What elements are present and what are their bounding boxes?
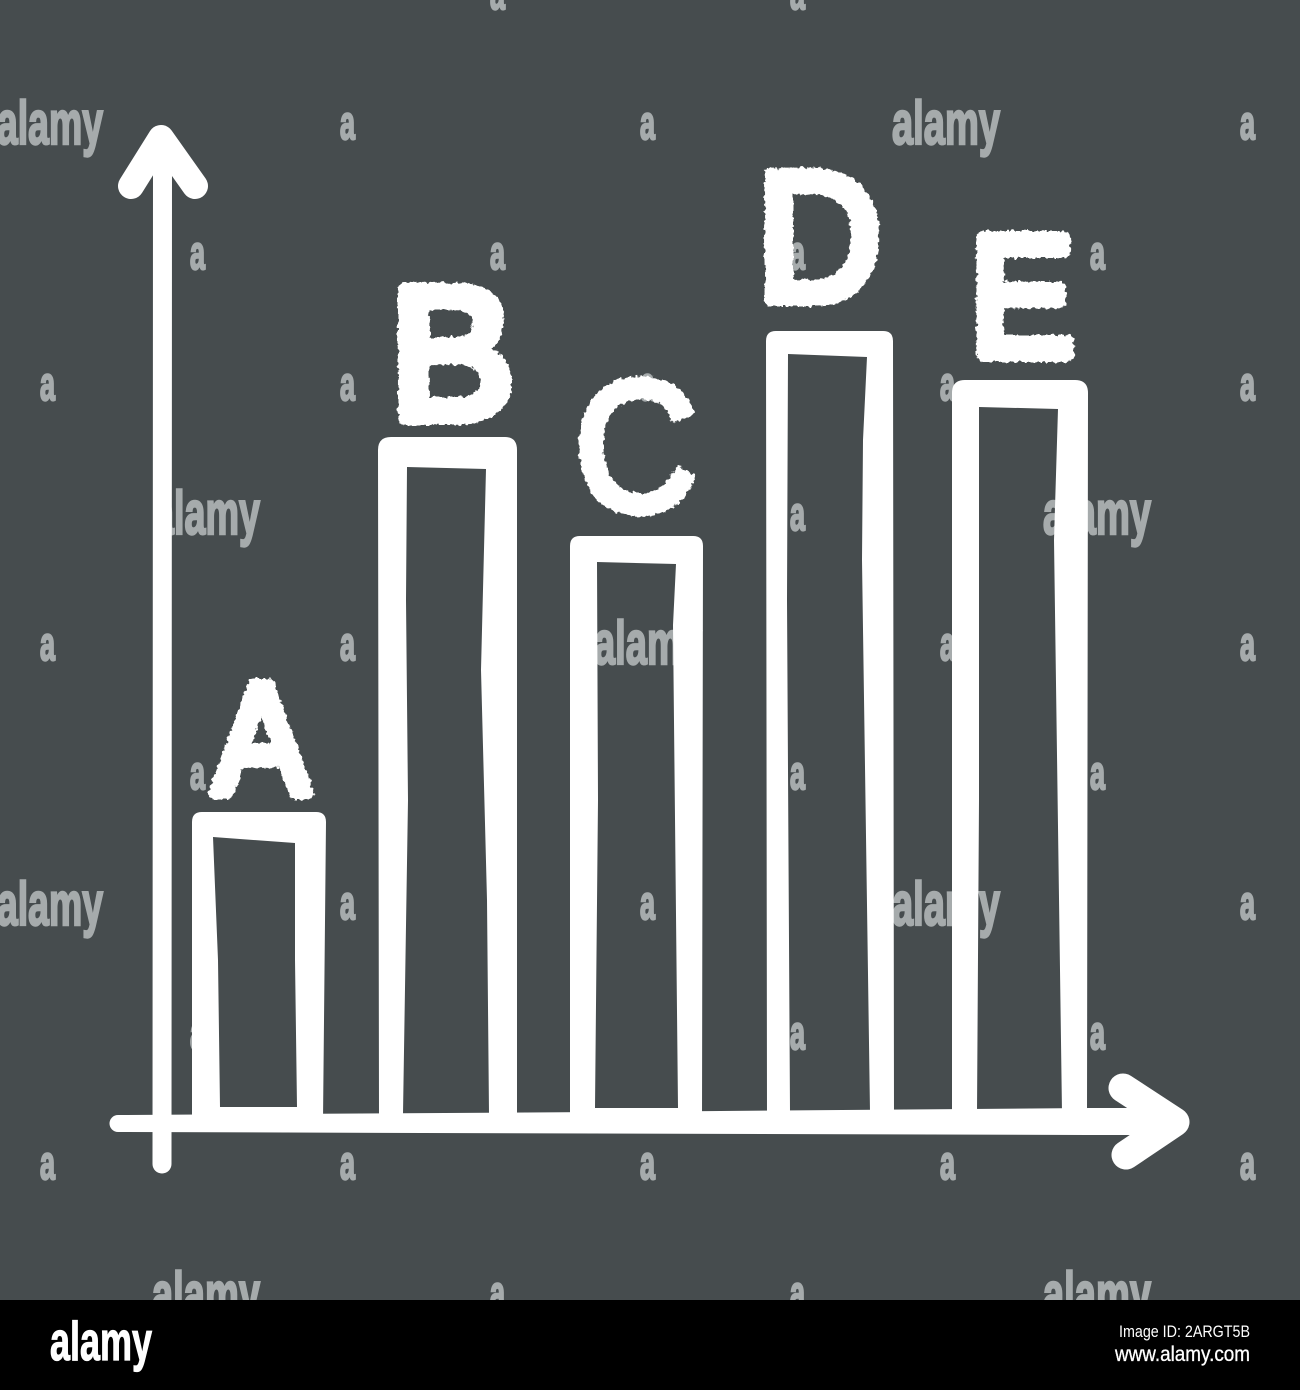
watermarks: a (1240, 357, 1255, 410)
watermarks: a (490, 487, 505, 540)
letter E: E (970, 202, 1074, 392)
watermarks: a (40, 617, 55, 670)
watermarks: alamy (0, 89, 103, 157)
watermarks: a (340, 357, 355, 410)
bar chart (110, 138, 1175, 1164)
y axis arrow (131, 138, 195, 1164)
watermarks: a (1090, 226, 1105, 279)
image id: Image ID: 2ARGT5B (1119, 1322, 1250, 1341)
watermarks: alamy (153, 479, 260, 547)
watermarks: a (340, 617, 355, 670)
website: www.alamy.com (1114, 1343, 1250, 1366)
bar D (766, 331, 894, 1120)
watermarks: a (490, 746, 505, 799)
watermarks: a (640, 1136, 655, 1189)
watermarks: alamy (0, 870, 103, 938)
bar letters (214, 134, 1074, 827)
watermarks: a (640, 876, 655, 929)
letter B: B (390, 249, 514, 458)
watermarks: a (190, 226, 205, 279)
watermarks: a (640, 357, 655, 410)
letter C: C (574, 344, 698, 550)
watermarks: a (1090, 1006, 1105, 1059)
bar E (952, 380, 1088, 1120)
watermarks: a (640, 96, 655, 149)
watermarks: a (40, 1136, 55, 1189)
watermarks: a (790, 487, 805, 540)
watermarks: alamy (1043, 479, 1151, 547)
watermarks: a (790, 746, 805, 799)
watermarks: alamy (594, 609, 702, 677)
watermarks: a (190, 1006, 205, 1059)
watermarks: a (940, 357, 955, 410)
watermarks: a (490, 1266, 505, 1319)
bar A (192, 812, 326, 1120)
watermarks: a (40, 357, 55, 410)
watermarks: alamy (892, 89, 1000, 157)
letter A: A (214, 652, 308, 827)
bar C (570, 536, 703, 1120)
watermarks: a (490, 1006, 505, 1059)
watermarks: a (190, 746, 205, 799)
watermarks: a (340, 96, 355, 149)
footer logo: alamy (50, 1310, 152, 1372)
watermarks: a (1240, 876, 1255, 929)
watermarks: a (790, 226, 805, 279)
letter D: D (756, 134, 882, 339)
watermarks: alamy (1043, 1260, 1151, 1328)
watermarks: a (940, 617, 955, 670)
watermarks: a (790, 1266, 805, 1319)
watermarks: a (940, 1136, 955, 1189)
watermarks: a (340, 1136, 355, 1189)
watermarks: a (340, 876, 355, 929)
x axis arrow (110, 1088, 1175, 1155)
watermarks: a (490, 226, 505, 279)
watermarks: a (1240, 617, 1255, 670)
watermarks: a (1240, 1136, 1255, 1189)
bar B (378, 437, 517, 1120)
watermarks: alamy (892, 870, 1000, 938)
watermarks: a (1090, 746, 1105, 799)
watermarks: a (1240, 96, 1255, 149)
footer bar (0, 1300, 1300, 1390)
watermarks: alamy (152, 1260, 260, 1328)
watermarks: a (790, 1006, 805, 1059)
